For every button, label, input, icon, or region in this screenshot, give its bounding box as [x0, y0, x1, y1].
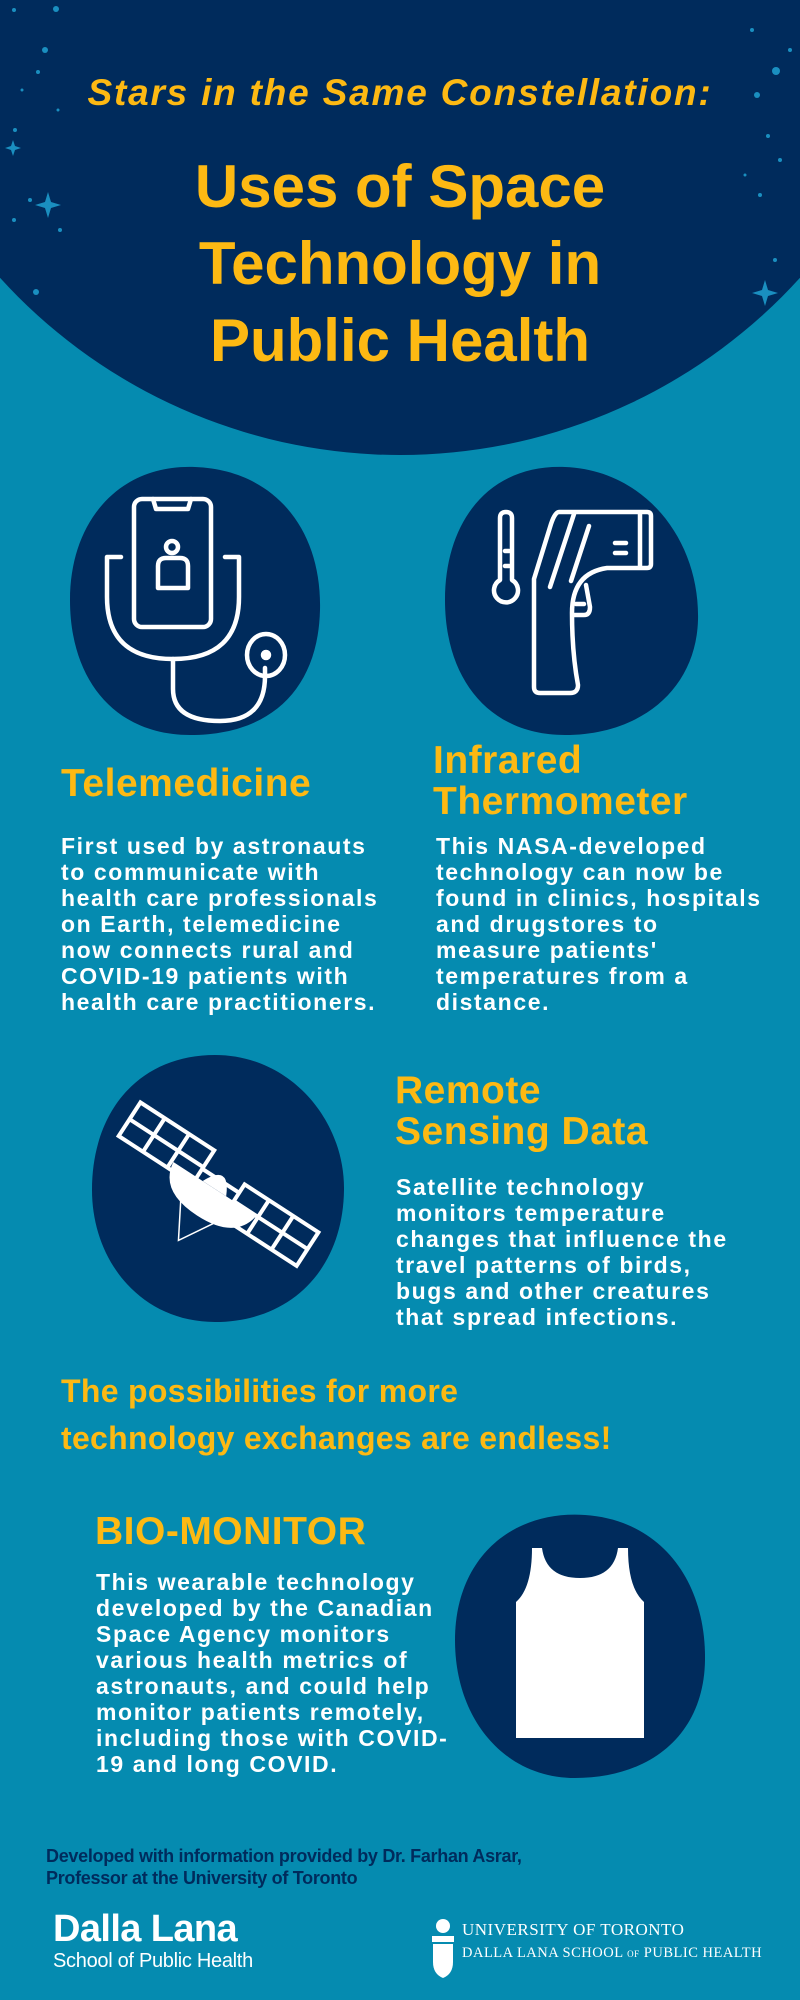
text: telemedicine description: health care professionals: [61, 885, 378, 911]
text: bio-monitor description: including those with COVID-: [96, 1725, 448, 1751]
text: telemedicine description: First used by astronauts: [61, 833, 367, 859]
text: remote sensing description: monitors temperature: [396, 1200, 666, 1226]
callout: possibilities: [61, 1373, 612, 1456]
heading: Remote Sensing Data: [395, 1069, 648, 1153]
credits: Professor at the University of Toronto: [46, 1868, 357, 1888]
text: remote sensing description: travel patterns of birds,: [396, 1252, 692, 1278]
callout: possibilities: technology exchanges are endless!: [61, 1420, 612, 1456]
text: bio-monitor description: Space Agency monitors: [96, 1621, 391, 1647]
title: Uses of Space: [195, 153, 605, 220]
text: remote sensing description: bugs and other creatures: [396, 1278, 710, 1304]
text: bio-monitor description: astronauts, and could help: [96, 1673, 430, 1699]
logo: University of Toronto: [432, 1919, 762, 1978]
credits: [46, 1846, 522, 1888]
heading: Remote Sensing Data: Remote: [395, 1069, 541, 1112]
heading: Telemedicine: Telemedicine: [61, 762, 311, 805]
text: telemedicine description: to communicate with: [61, 859, 320, 885]
text: telemedicine description: [61, 833, 378, 1015]
text: infrared description: and drugstores to: [436, 911, 659, 937]
text: telemedicine description: now connects rural and: [61, 937, 354, 963]
heading: Infrared Thermometer: [433, 739, 688, 823]
text: bio-monitor description: various health metrics of: [96, 1647, 408, 1673]
text: bio-monitor description: [96, 1569, 448, 1777]
text: infrared description: measure patients': [436, 937, 658, 963]
text: infrared description: [436, 833, 762, 1015]
credits: Developed with information provided by Dr. Farhan Asrar,: [46, 1846, 522, 1866]
heading: Infrared Thermometer: Infrared: [433, 739, 582, 782]
callout: possibilities: The possibilities for more: [61, 1373, 458, 1409]
text: infrared description: distance.: [436, 989, 550, 1015]
title: Technology in: [199, 230, 601, 297]
text: infrared description: technology can now be: [436, 859, 724, 885]
logo: Dalla Lana: [53, 1908, 253, 1972]
text: telemedicine description: on Earth, telemedicine: [61, 911, 342, 937]
text: remote sensing description: changes that influence the: [396, 1226, 728, 1252]
text: telemedicine description: health care practitioners.: [61, 989, 376, 1015]
text: UNIVERSITY OF TORONTO: [462, 1920, 684, 1939]
heading: Infrared Thermometer: Thermometer: [433, 780, 688, 823]
text: bio-monitor description: 19 and long COVID.: [96, 1751, 338, 1777]
text: remote sensing description: Satellite technology: [396, 1174, 645, 1200]
logo: Dalla Lana: Dalla Lana: [53, 1908, 237, 1950]
text: bio-monitor description: This wearable technology: [96, 1569, 416, 1595]
text: infrared description: temperatures from a: [436, 963, 689, 989]
text: infrared description: This NASA-developed: [436, 833, 707, 859]
heading: BIO-MONITOR: BIO-MONITOR: [95, 1510, 366, 1553]
text: bio-monitor description: monitor patients remotely,: [96, 1699, 425, 1725]
title: Public Health: [210, 307, 590, 374]
subtitle: Stars in the Same Constellation:: [87, 72, 713, 113]
text: remote sensing description: that spread infections.: [396, 1304, 678, 1330]
text: DALLA LANA SCHOOL OF PUBLIC HEALTH: [462, 1945, 762, 1961]
heading: Remote Sensing Data: Sensing Data: [395, 1110, 648, 1153]
text: telemedicine description: COVID-19 patients with: [61, 963, 349, 989]
text: bio-monitor description: developed by the Canadian: [96, 1595, 434, 1621]
logo: Dalla Lana: School of Public Health: [53, 1950, 253, 1972]
text: infrared description: found in clinics, hospitals: [436, 885, 762, 911]
title: [195, 153, 605, 374]
text: remote sensing description: [396, 1174, 728, 1330]
